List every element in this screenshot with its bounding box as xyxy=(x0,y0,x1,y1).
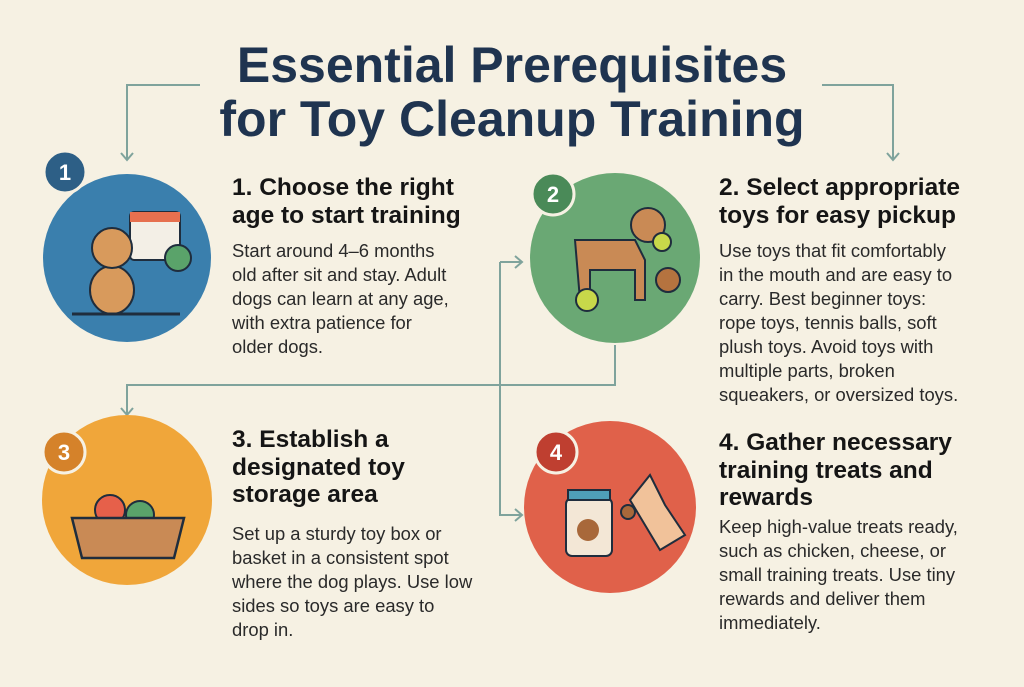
text 4 xyxy=(719,516,958,633)
text 2: Use toys that fit comfortably xyxy=(719,240,946,261)
text 1: old after sit and stay. Adult xyxy=(232,264,446,285)
text 1: older dogs. xyxy=(232,336,323,357)
heading 4: rewards xyxy=(719,484,813,511)
heading 1: 1. Choose the right xyxy=(232,174,454,201)
text 3: Set up a sturdy toy box or xyxy=(232,523,442,544)
heading 4 xyxy=(719,429,952,511)
text 2: in the mouth and are easy to xyxy=(719,264,952,285)
text 2: rope toys, tennis balls, soft xyxy=(719,312,937,333)
title: for Toy Cleanup Training xyxy=(219,91,805,147)
heading 1 xyxy=(232,174,461,228)
heading 3 xyxy=(232,426,405,508)
text 3: basket in a consistent spot xyxy=(232,547,449,568)
text 2: squeakers, or oversized toys. xyxy=(719,384,958,405)
text 2 xyxy=(719,240,958,405)
heading 3: designated toy xyxy=(232,454,405,480)
heading 4: training treats and xyxy=(719,456,933,484)
heading 2 xyxy=(719,174,960,228)
text 4: small training treats. Use tiny xyxy=(719,564,955,585)
heading 3: storage area xyxy=(232,481,378,508)
text 2: carry. Best beginner toys: xyxy=(719,288,926,309)
text 1: dogs can learn at any age, xyxy=(232,288,449,309)
icon: step 3 toy box: 3 xyxy=(58,440,70,465)
text 3: sides so toys are easy to xyxy=(232,595,434,616)
text 2: multiple parts, broken xyxy=(719,360,895,381)
text 4: rewards and deliver them xyxy=(719,588,925,609)
text 1: with extra patience for xyxy=(232,312,412,333)
icon: step 4 treat jar and hand: 4 xyxy=(550,440,563,465)
text 4: immediately. xyxy=(719,612,821,633)
text 4: Keep high-value treats ready, xyxy=(719,516,958,537)
text 1 xyxy=(232,240,449,357)
icon: step 1 puppy and calendar: 1 xyxy=(59,160,71,185)
heading 4: 4. Gather necessary xyxy=(719,429,952,456)
title xyxy=(219,37,805,147)
heading 2: toys for easy pickup xyxy=(719,202,956,228)
text 4: such as chicken, cheese, or xyxy=(719,540,946,561)
text 2: plush toys. Avoid toys with xyxy=(719,336,933,357)
heading 1: age to start training xyxy=(232,202,461,228)
text 3: drop in. xyxy=(232,619,293,640)
text 3: where the dog plays. Use low xyxy=(232,571,472,592)
text 1: Start around 4–6 months xyxy=(232,240,434,261)
title: Essential Prerequisites xyxy=(237,37,787,93)
heading 2: 2. Select appropriate xyxy=(719,174,960,201)
icon: step 2 dog and toys: 2 xyxy=(547,182,559,207)
text 3 xyxy=(232,523,472,640)
heading 3: 3. Establish a xyxy=(232,426,389,453)
